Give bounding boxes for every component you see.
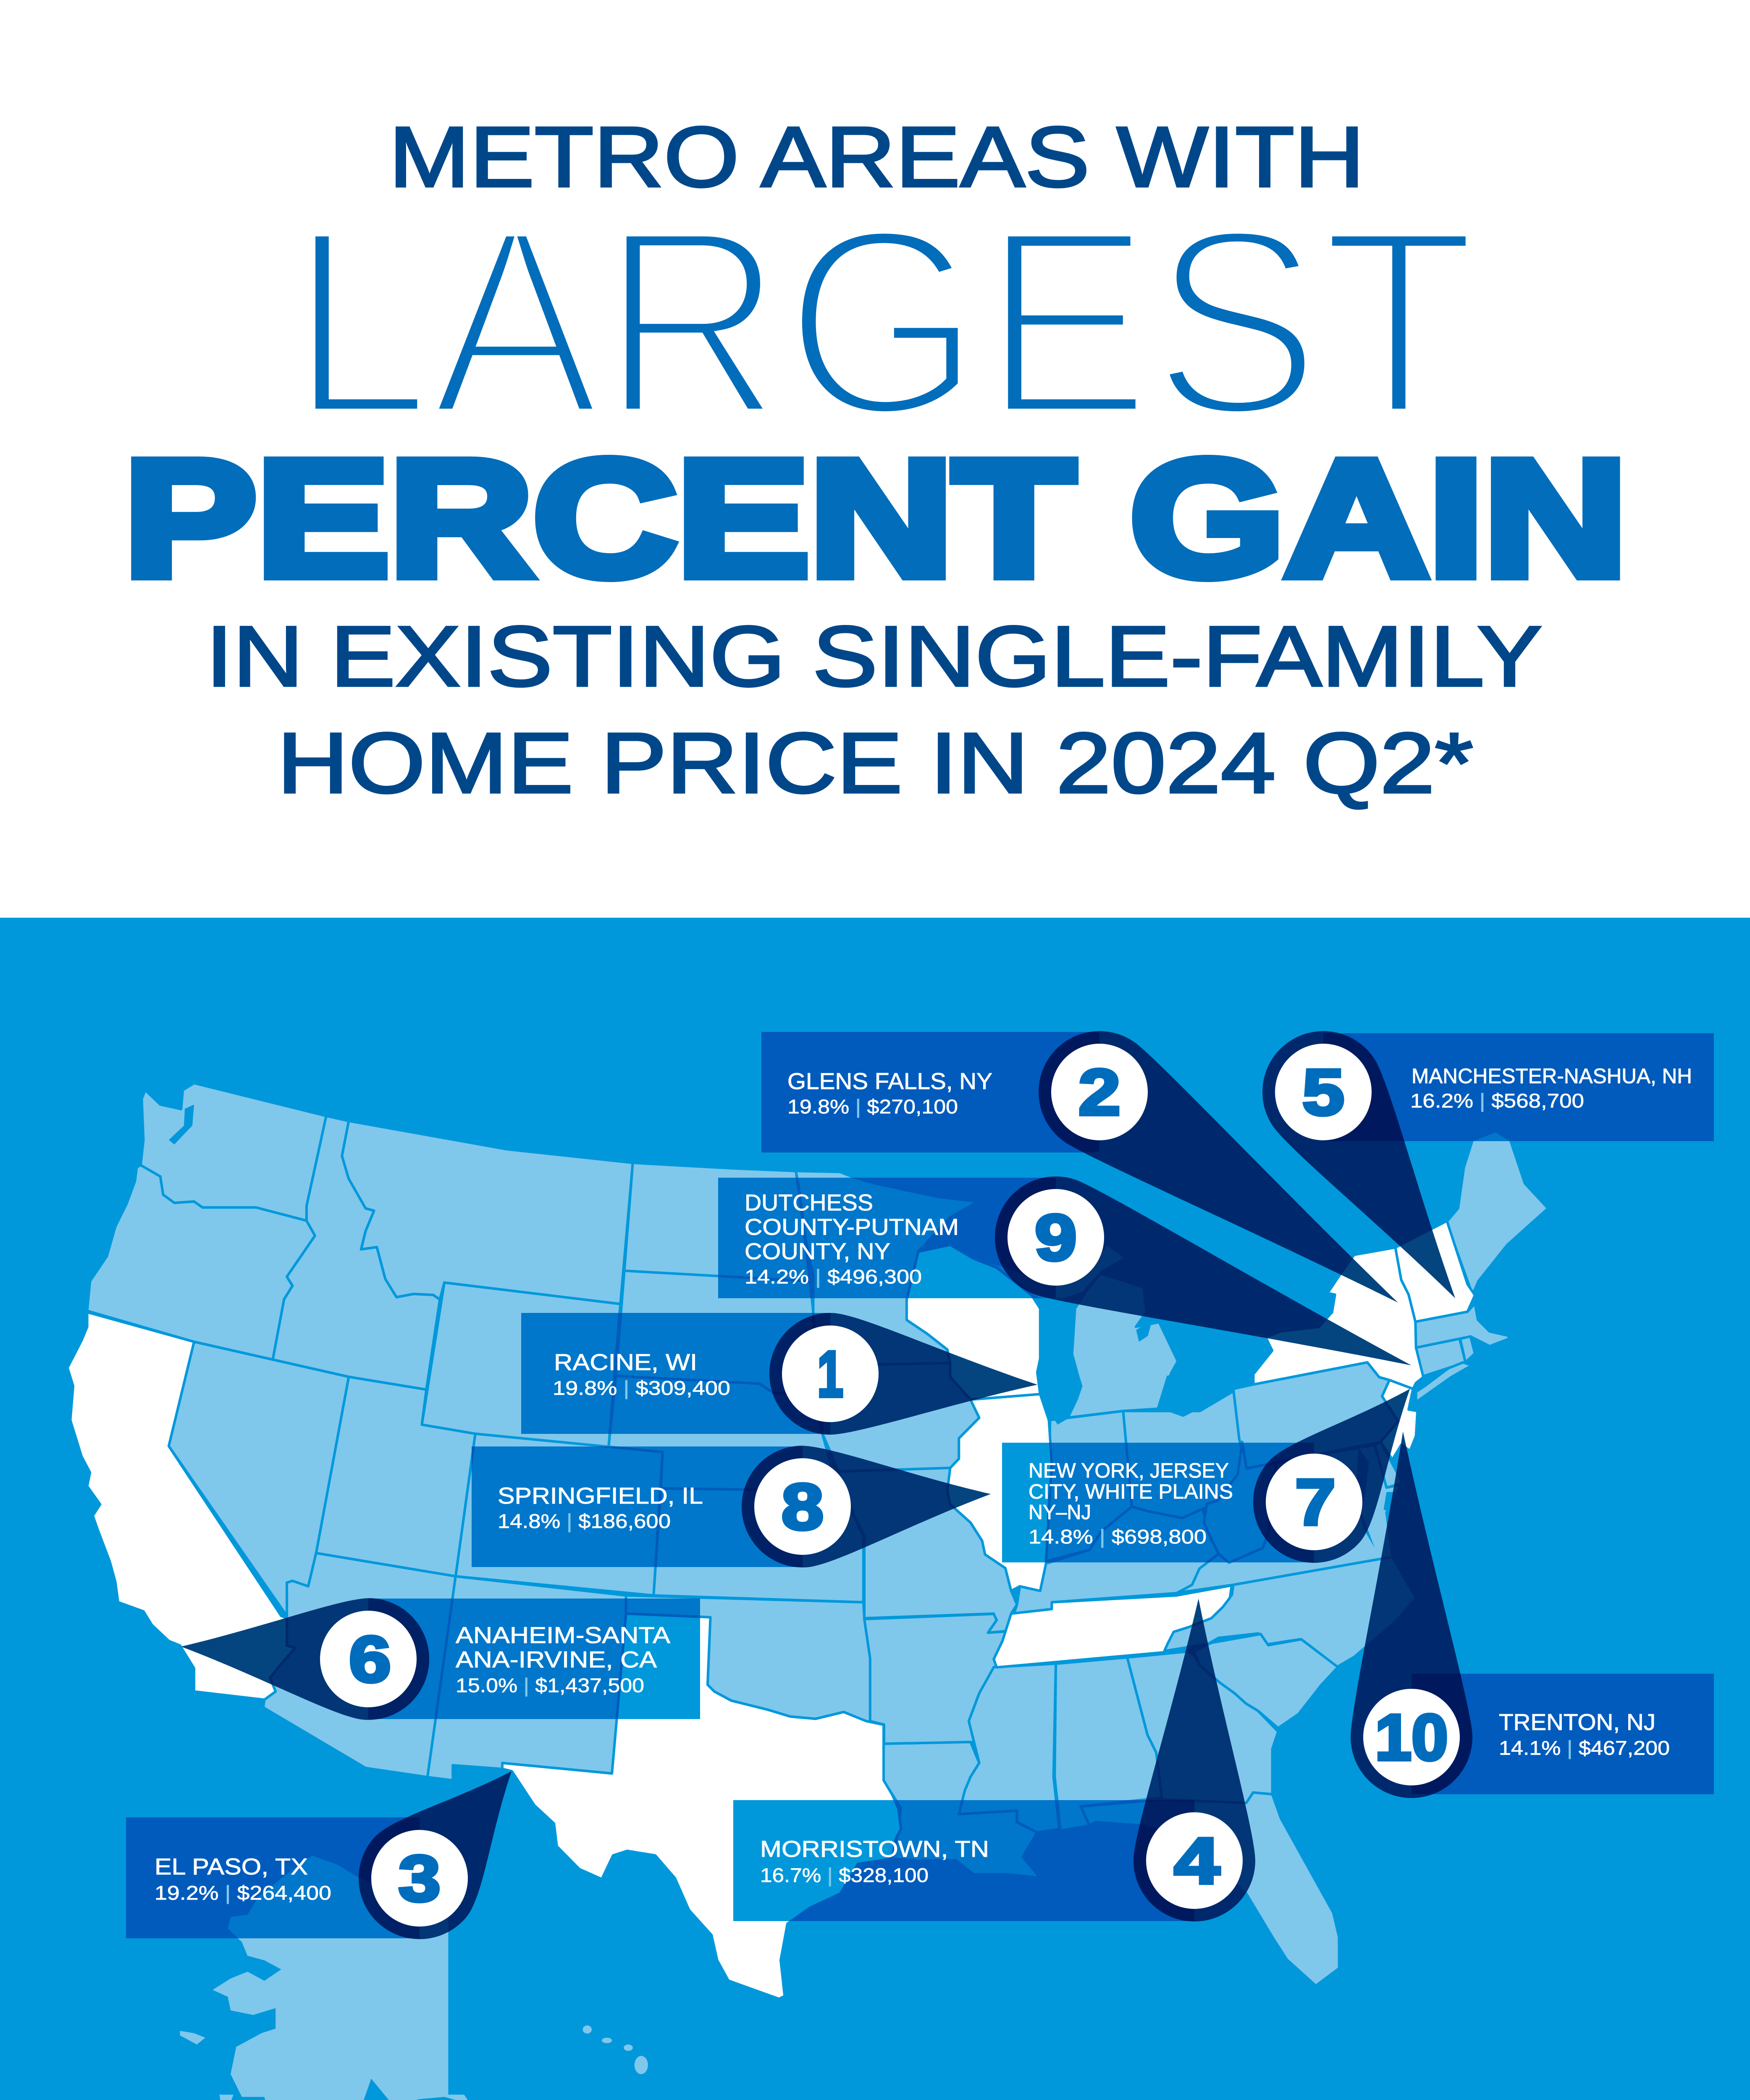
- pin 5: 5: [1302, 1056, 1344, 1129]
- callout 1: Racine: [521, 1313, 830, 1434]
- callout 7: New York-Jersey City-White Plains: NY–NJ: [1028, 1501, 1091, 1524]
- title line: percent gain: PERCENT GAIN: [124, 426, 1627, 611]
- callout 6: Anaheim-Santa Ana-Irvine: [368, 1599, 700, 1719]
- Hawaii: [583, 2025, 648, 2074]
- Lake Michigan: [1036, 1304, 1083, 1425]
- callout 9: Dutchess County-Putnam County: COUNTY-PUTNAM: [745, 1214, 959, 1240]
- callout 6: Anaheim-Santa Ana-Irvine: ANA-IRVINE, CA: [456, 1646, 657, 1672]
- callout 6: Anaheim-Santa Ana-Irvine: 15.0% | $1,437,500: [456, 1674, 644, 1696]
- pin 5: [1239, 1008, 1506, 1331]
- western and plains states: [87, 1083, 871, 1780]
- mid-atlantic and new england states: [1164, 1303, 1509, 1667]
- callout 1: Racine: 19.8% | $309,400: [553, 1377, 730, 1399]
- callout 3: El Paso: EL PASO, TX: [155, 1853, 308, 1880]
- callout 7: New York-Jersey City-White Plains: 14.8% | $698,800: [1028, 1525, 1207, 1548]
- US map: [42, 1083, 1548, 2100]
- pin 8: 8: [782, 1470, 824, 1543]
- title: [124, 109, 1627, 811]
- callout 2: Glens Falls: GLENS FALLS, NY: [787, 1068, 992, 1094]
- blue map panel: [0, 918, 1750, 2100]
- title line: largest: LARGEST: [289, 173, 1477, 471]
- highlighted northeast states: New York, New Hampshire, New Jersey: [1253, 1221, 1475, 1460]
- pin 4: [1133, 1598, 1259, 1922]
- Lakes Huron, Erie and coastal inlets: [1136, 1320, 1398, 1548]
- callout 2: Glens Falls: 19.8% | $270,100: [787, 1095, 958, 1118]
- callout 4: Morristown: MORRISTOWN, TN: [760, 1836, 989, 1862]
- callout 9: Dutchess County-Putnam County: DUTCHESS: [745, 1189, 873, 1215]
- pin 6: [177, 1586, 433, 1724]
- title line: home price: HOME PRICE IN 2024 Q2*: [277, 715, 1473, 811]
- callout 7: New York-Jersey City-White Plains: NEW YORK, JERSEY: [1028, 1460, 1229, 1482]
- pin 8: [738, 1433, 995, 1571]
- callout 7: New York-Jersey City-White Plains: CITY, WHITE PLAINS: [1028, 1480, 1233, 1503]
- pin 6: 6: [349, 1623, 391, 1696]
- title line: metro areas with: METRO AREAS WITH: [389, 109, 1364, 205]
- pin 9: 9: [1035, 1201, 1077, 1274]
- highlighted central states: Wisconsin, Illinois, Tennessee: [907, 1245, 1232, 1667]
- callout 10: Trenton: TRENTON, NJ: [1499, 1709, 1656, 1735]
- pin 9: [978, 1159, 1432, 1423]
- callout 5: Manchester-Nashua: [1323, 1033, 1714, 1141]
- callout 7: New York-Jersey City-White Plains: [1002, 1443, 1314, 1562]
- pin 1: 1: [817, 1338, 843, 1410]
- southern states: [864, 1614, 1339, 1986]
- callout 5: Manchester-Nashua: MANCHESTER-NASHUA, NH: [1412, 1064, 1692, 1088]
- Puget Sound: [169, 1105, 194, 1144]
- pin 10: 10: [1375, 1701, 1448, 1774]
- pin 4: 4: [1174, 1824, 1220, 1897]
- callout 9: Dutchess County-Putnam County: COUNTY, NY: [745, 1238, 890, 1264]
- pin 7: 7: [1295, 1466, 1335, 1538]
- callout 8: Springfield: SPRINGFIELD, IL: [498, 1483, 703, 1509]
- callout 8: Springfield: 14.8% | $186,600: [498, 1510, 671, 1532]
- pin 7: [1228, 1349, 1456, 1588]
- callout 6: Anaheim-Santa Ana-Irvine: ANAHEIM-SANTA: [456, 1622, 670, 1648]
- pin 3: [334, 1732, 558, 1964]
- pin 1: [766, 1310, 1041, 1446]
- callout 9: Dutchess County-Putnam County: 14.2% | $496,300: [745, 1265, 922, 1288]
- pin 10: [1342, 1430, 1474, 1800]
- callout 3: El Paso: 19.2% | $264,400: [155, 1882, 331, 1904]
- callout 5: Manchester-Nashua: 16.2% | $568,700: [1410, 1089, 1584, 1112]
- callout 9: Dutchess County-Putnam County: [718, 1178, 1056, 1298]
- Alaska: [42, 1856, 546, 2100]
- callout 2: Glens Falls: [761, 1032, 1099, 1152]
- pin 3: 3: [399, 1842, 441, 1915]
- callout 10: Trenton: [1412, 1674, 1714, 1794]
- callout 4: Morristown: [733, 1800, 1194, 1921]
- callout 3: El Paso: [126, 1817, 420, 1938]
- callout 8: Springfield: [472, 1446, 803, 1567]
- highlighted western states: California and Texas: [68, 1312, 901, 1999]
- pin 2: [1015, 1007, 1433, 1352]
- callout 4: Morristown: 16.7% | $328,100: [760, 1864, 929, 1886]
- midwest states: [796, 1131, 1548, 1633]
- title line: in existing single-family: IN EXISTING SINGLE-FAMILY: [206, 609, 1542, 704]
- callout 1: Racine: RACINE, WI: [554, 1349, 697, 1375]
- callout 10: Trenton: 14.1% | $467,200: [1499, 1737, 1670, 1759]
- pin 2: 2: [1078, 1056, 1120, 1129]
